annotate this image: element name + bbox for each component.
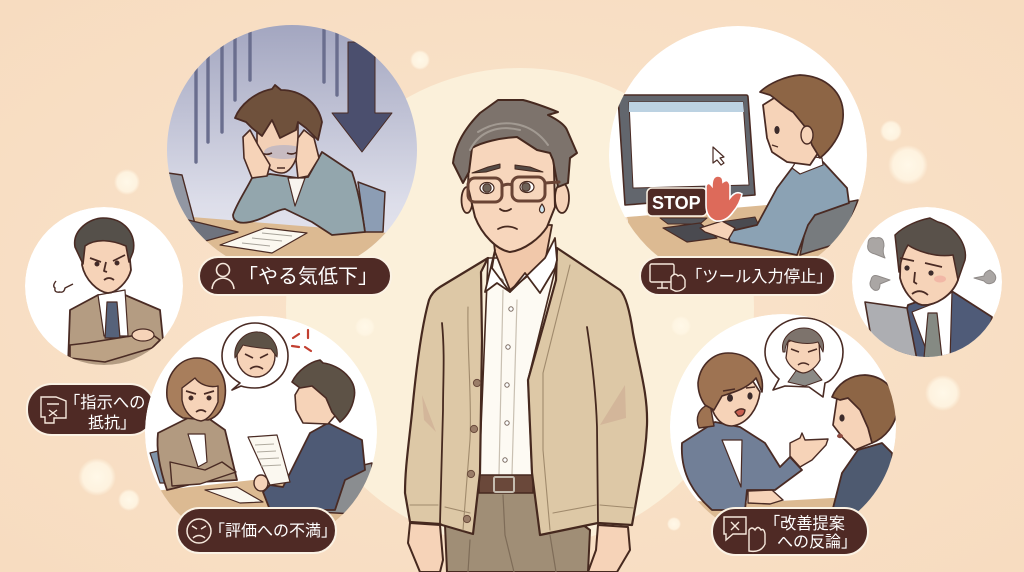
body	[233, 152, 365, 235]
worker body	[727, 162, 849, 255]
trousers	[445, 490, 590, 572]
panel: tool input stopped	[609, 26, 867, 256]
ears	[462, 187, 472, 213]
decorative light bokeh	[78, 50, 961, 531]
worker head	[762, 98, 818, 166]
face	[468, 128, 555, 252]
belt	[479, 475, 533, 493]
central figure: worried middle-aged man	[405, 100, 647, 572]
label: dissatisfaction	[177, 508, 337, 553]
ponytail	[697, 404, 714, 428]
head	[81, 242, 132, 294]
folds	[422, 385, 626, 432]
panel: pushback against improvement proposals	[670, 314, 900, 545]
man's head	[294, 386, 335, 425]
puff of breath	[54, 281, 73, 292]
icon: monitor and hand	[650, 264, 685, 291]
lower hand	[748, 490, 783, 504]
head	[900, 230, 958, 305]
cardigan buttons	[463, 379, 481, 523]
nose and mouth	[498, 209, 517, 229]
keyboard	[663, 223, 717, 242]
icon: down arrow	[332, 42, 392, 152]
woman's head	[710, 380, 760, 426]
label: tool input stop: 「ツール入力停止」	[686, 268, 833, 286]
cardigan right side	[528, 248, 647, 535]
label: resistance	[27, 384, 155, 435]
held paper	[248, 435, 290, 485]
gloom lines	[196, 30, 337, 162]
label: tool input stop	[640, 257, 835, 295]
icon: angry face	[187, 519, 211, 543]
eyebrows	[472, 164, 500, 173]
chair	[358, 182, 385, 232]
hair	[235, 85, 322, 140]
document	[220, 228, 307, 253]
sleeve seams and plackets	[440, 323, 598, 523]
woman's suit	[682, 422, 802, 510]
label: pushback: 「改善提案	[764, 515, 845, 533]
hands on keyboard	[700, 221, 735, 240]
icon: red hand	[706, 176, 742, 221]
shirt buttons	[499, 279, 513, 462]
eyes	[480, 182, 494, 194]
paper on desk	[205, 487, 263, 503]
man seen from behind	[263, 423, 365, 510]
speech bubble with angry face	[222, 323, 311, 390]
woman	[157, 418, 237, 490]
hair	[453, 100, 577, 187]
label: motivation drop	[199, 257, 391, 295]
jacket	[68, 295, 163, 370]
laptop	[168, 173, 198, 235]
panel: resistance to instructions	[25, 207, 183, 370]
desk	[670, 498, 896, 545]
panel: dissatisfaction with evaluation	[145, 316, 377, 521]
neck	[492, 225, 552, 290]
label: pushback: への反論」	[777, 533, 857, 551]
label: pushback	[712, 508, 868, 555]
panel: motivation drop	[167, 25, 417, 280]
cursor	[713, 147, 724, 165]
glasses	[468, 177, 559, 202]
central glow circle	[286, 68, 754, 548]
STOP sign: STOP	[652, 193, 701, 213]
raised hand	[790, 433, 828, 467]
face	[257, 120, 298, 173]
hands on head	[243, 130, 270, 178]
shirt	[479, 258, 558, 476]
icon: person	[212, 264, 234, 289]
label: resistance: 抵抗」	[88, 414, 136, 432]
tablet	[865, 302, 917, 360]
puffs of steam	[868, 238, 996, 290]
chair right	[326, 462, 373, 514]
monitor	[618, 95, 755, 205]
crossed arms	[70, 333, 160, 362]
label: motivation drop: 「やる気低下」	[238, 265, 378, 288]
chair	[149, 450, 164, 484]
shirt and tie	[98, 290, 128, 336]
speech bubble	[765, 318, 843, 397]
chair	[800, 200, 858, 255]
collar	[485, 250, 510, 292]
panel: pushback worker	[852, 207, 1002, 360]
STOP sign	[647, 176, 742, 221]
cardigan left side	[405, 258, 488, 534]
hands	[408, 523, 443, 572]
icon: document with cross	[41, 397, 66, 423]
desk	[160, 478, 368, 521]
suit	[895, 290, 992, 360]
desk	[627, 200, 859, 256]
icon: crossed bubble and hand	[724, 517, 765, 551]
label: dissatisfaction: 「評価への不満」	[209, 522, 337, 540]
monitor stand	[660, 218, 707, 224]
man's body	[832, 443, 900, 545]
sweat drop	[540, 204, 544, 213]
desk	[186, 216, 386, 256]
man's head	[833, 392, 880, 450]
label: resistance: 「指示への	[64, 394, 145, 412]
